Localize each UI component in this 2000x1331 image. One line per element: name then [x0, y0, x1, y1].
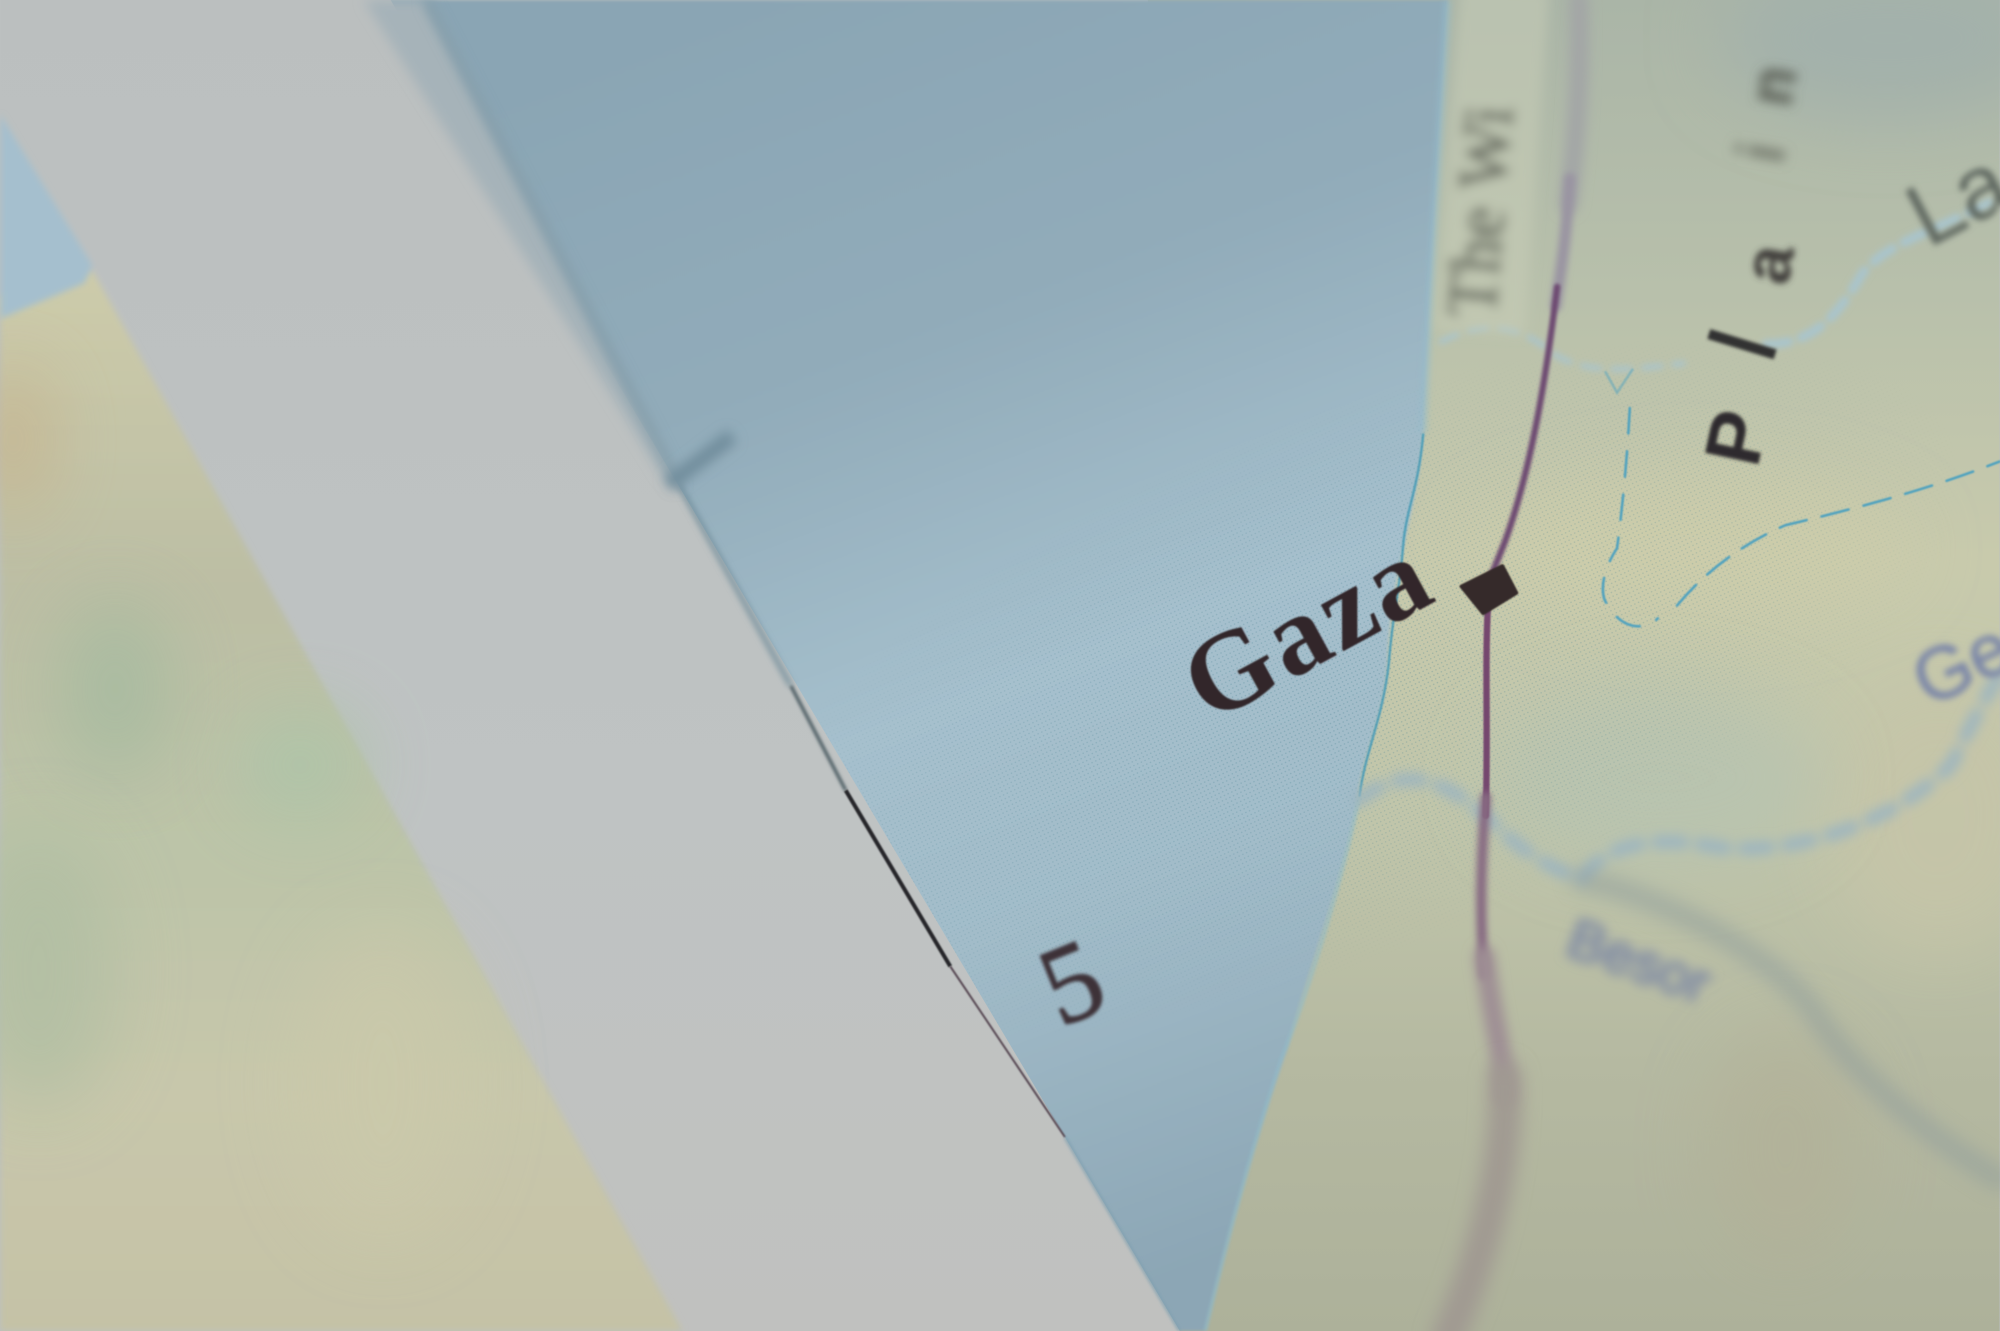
label: Plain: i — [1722, 136, 1801, 168]
coastline — [1205, 0, 1447, 1331]
dashed river upper — [1441, 198, 2000, 369]
label: Plain — [1687, 60, 1811, 473]
label: Gaza: Gaza — [1162, 513, 1450, 746]
panel: right land area — [1148, 0, 2000, 1331]
panel: white page margin strip — [0, 0, 1180, 1331]
panel: sea — [383, 0, 1447, 1331]
icon: Gaza city marker — [1462, 566, 1516, 613]
label: number 5: 5 — [1023, 915, 1121, 1051]
label: The Wi: The Wi — [1432, 102, 1529, 320]
dashed river lower — [1358, 676, 2000, 1179]
label: Plain: n — [1733, 60, 1811, 111]
panel: left sea corner — [0, 115, 92, 319]
road line — [1447, 0, 1579, 1331]
label: Plain: P — [1687, 403, 1785, 473]
blurred tick mark on sea — [669, 436, 732, 484]
label: Besor: Besor — [1559, 906, 1719, 1015]
page edge shadow line — [364, 0, 1180, 1331]
halftone print texture in the focus zone — [844, 378, 1895, 982]
panel: left map fragment — [0, 270, 683, 1331]
label: The Wi — [1432, 0, 1549, 334]
label: Plain: a — [1727, 238, 1809, 289]
dashed river middle — [1603, 370, 2000, 626]
